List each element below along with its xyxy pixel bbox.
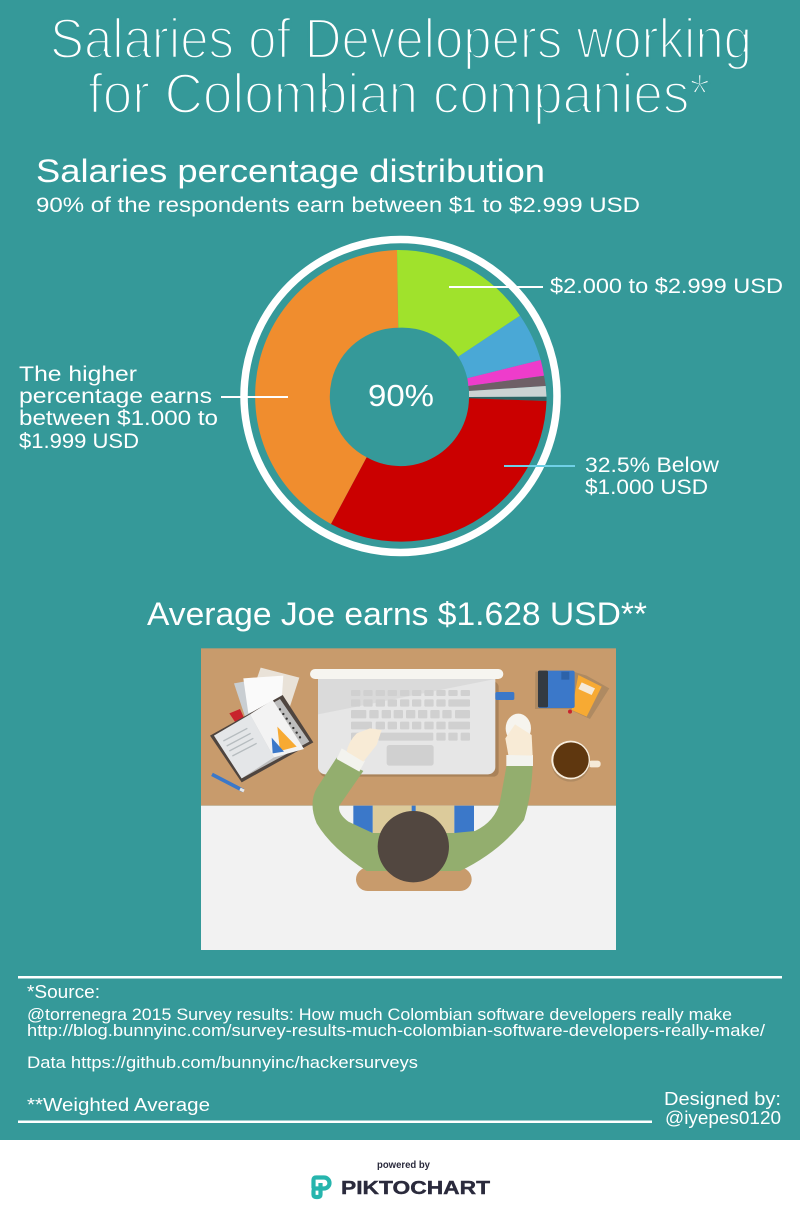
source text: @torrenegra 2015 Survey results: How much Colombian software developers really make [27,1006,732,1024]
person [312,714,533,882]
segment: pink [467,360,544,386]
segment: dark grey [468,376,546,391]
segment: blue [458,316,541,378]
floor [201,806,616,950]
footer: powered by Piktochart: PIKTOCHART [341,1178,490,1198]
segment: orange [255,250,398,524]
source section: http://blog.bunnyinc.com/survey-results-much-colombian-software-developers-really-make/ [27,1022,765,1040]
credit: Designed by: [664,1088,781,1109]
donut chart [244,240,557,552]
segment: dark teal [469,397,546,401]
footer: powered by Piktochart: powered by [377,1160,430,1171]
callout: 32.5% below: $1.000 USD [585,476,708,499]
segment: green [397,250,520,357]
left papers and notebook [210,668,313,782]
callout: 32.5% below: 32.5% Below [585,454,720,477]
desk [201,648,616,806]
outer ring [244,240,557,552]
pen [212,774,244,791]
callout: higher percentage: The higher [19,363,137,386]
data link: Data https://github.com/bunnyinc/hackersurveys [27,1054,418,1072]
source label: *Source: [27,981,100,1002]
subheading: 90% of the respondents earn between $1 to $2.999 USD [36,194,640,217]
source section: @iyepes0120 [665,1107,781,1128]
chair and straps [353,806,474,891]
logo mark [314,1178,330,1197]
heading: salaries distribution: Salaries percentage distribution [36,153,545,189]
callout: higher percentage: percentage earns [19,385,212,408]
footnote: **Weighted Average [27,1094,210,1115]
center value: 90% [368,378,434,413]
segment: red [331,398,546,542]
title [50,7,752,126]
callout: $2.000 to $2.999: $2.000 to $2.999 USD [550,275,783,298]
illustration: developer at desk [201,648,616,950]
heading: average: Average Joe earns $1.628 USD** [147,596,647,632]
source section [18,976,782,1128]
callout: 32.5% below [504,454,720,499]
coffee cup [551,741,601,782]
title: for Colombian companies* [88,62,710,126]
footer: powered by Piktochart [0,1140,800,1220]
callout: higher percentage: $1.999 USD [19,430,139,453]
callout: higher percentage [19,363,288,453]
laptop [310,669,514,777]
segment: light grey [469,386,546,397]
books [535,671,609,719]
callout: higher percentage: between $1.000 to [19,407,218,430]
